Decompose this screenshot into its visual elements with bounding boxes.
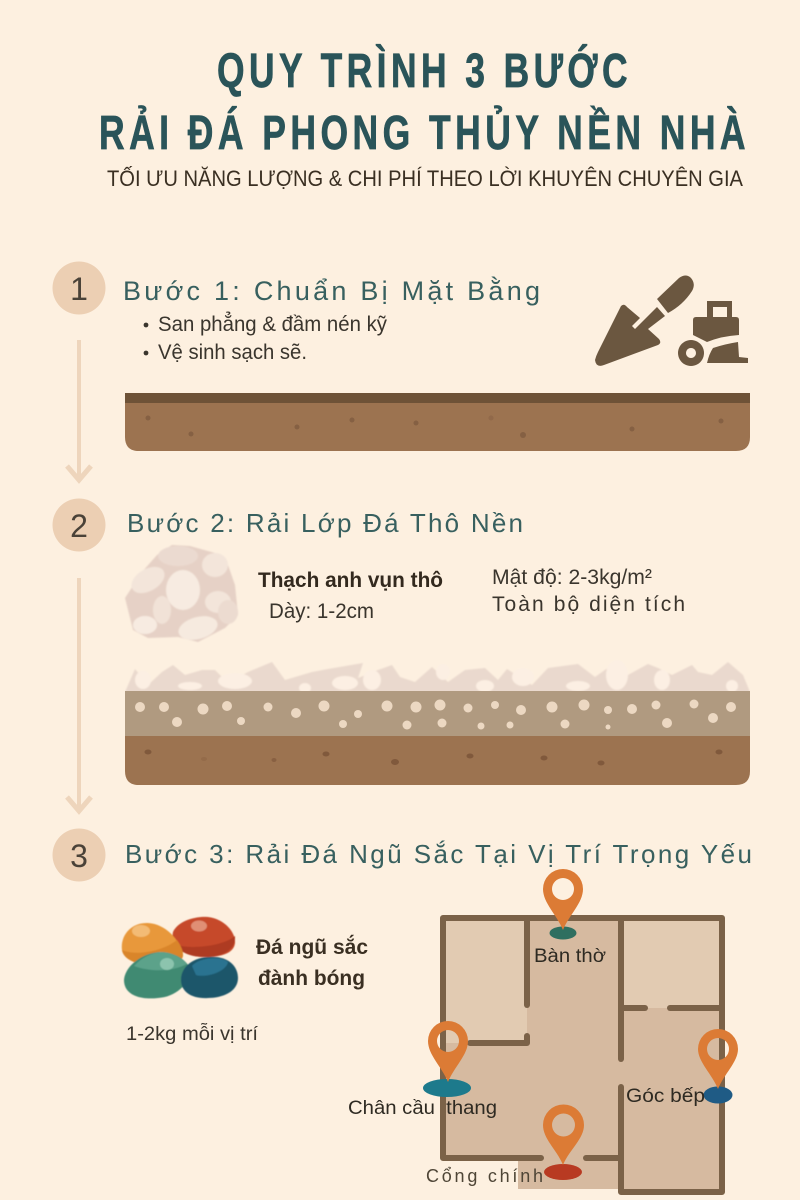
crushed quartz top layer <box>126 662 750 691</box>
quartz label <box>258 569 443 623</box>
gravel layer <box>125 691 750 736</box>
step 1 bullet list: Vệ sinh sạch sẽ. <box>158 341 307 364</box>
density details: Toàn bộ diện tích <box>492 593 685 616</box>
icon: trowel and bulldozer <box>595 276 748 366</box>
stone label: Đá ngũ sắc <box>256 935 368 959</box>
panel: step 2 <box>52 498 750 785</box>
step 1 bullet list <box>144 312 387 364</box>
icon: five-colour polished stones <box>122 917 238 998</box>
step 3 number badge: 3 <box>70 838 88 874</box>
marker: stair foot <box>348 1021 497 1119</box>
stone label: đành bóng <box>258 967 365 990</box>
marker: kitchen corner: Góc bếp <box>626 1086 705 1107</box>
step 2 number badge: 2 <box>70 508 88 544</box>
step 2 heading: Bước 2: Rải Lớp Đá Thô Nền <box>127 508 523 538</box>
title <box>99 43 750 160</box>
density details: Mật độ: 2-3kg/m² <box>492 566 652 589</box>
floor plan <box>443 918 722 1192</box>
step 1 bullet list: San phẳng & đầm nén kỹ <box>158 312 387 336</box>
density details <box>492 566 685 616</box>
step 1 number badge <box>52 262 106 314</box>
marker: kitchen corner <box>626 1029 738 1107</box>
arrow: step 2 to step 3 <box>67 578 91 811</box>
step 1 heading: Bước 1: Chuẩn Bị Mặt Bằng <box>123 275 540 306</box>
icon: crushed quartz pile <box>125 545 238 644</box>
stone quantity: 1-2kg mỗi vị trí <box>126 1023 259 1045</box>
panel: step 3 <box>52 828 752 1192</box>
marker: stair foot: Chân cầu thang <box>348 1098 497 1119</box>
step 3 number badge <box>52 828 106 882</box>
soil layer <box>125 736 750 785</box>
marker: main gate: Cổng chính <box>426 1166 543 1186</box>
marker: main gate <box>426 1104 584 1186</box>
arrow: step 1 to step 2 <box>67 340 91 480</box>
step 1 number badge: 1 <box>70 271 88 307</box>
soil cross-section 1 <box>125 393 750 451</box>
step 2 number badge <box>52 498 106 552</box>
stone label <box>256 935 368 990</box>
marker: altar: Bàn thờ <box>534 946 606 967</box>
subtitle: TỐI ƯU NĂNG LƯỢNG & CHI PHÍ THEO LỜI KHUYÊN CHUYÊN GIA <box>107 165 743 191</box>
step 3 heading: Bước 3: Rải Đá Ngũ Sắc Tại Vị Trí Trọng Yếu <box>125 839 752 869</box>
panel: step 1 <box>52 262 750 451</box>
title: QUY TRÌNH 3 BƯỚC <box>217 43 632 98</box>
marker: altar <box>534 869 606 967</box>
quartz label: Thạch anh vụn thô <box>258 569 443 592</box>
layered ground cross-section <box>125 660 750 785</box>
quartz label: Dày: 1-2cm <box>269 600 374 623</box>
